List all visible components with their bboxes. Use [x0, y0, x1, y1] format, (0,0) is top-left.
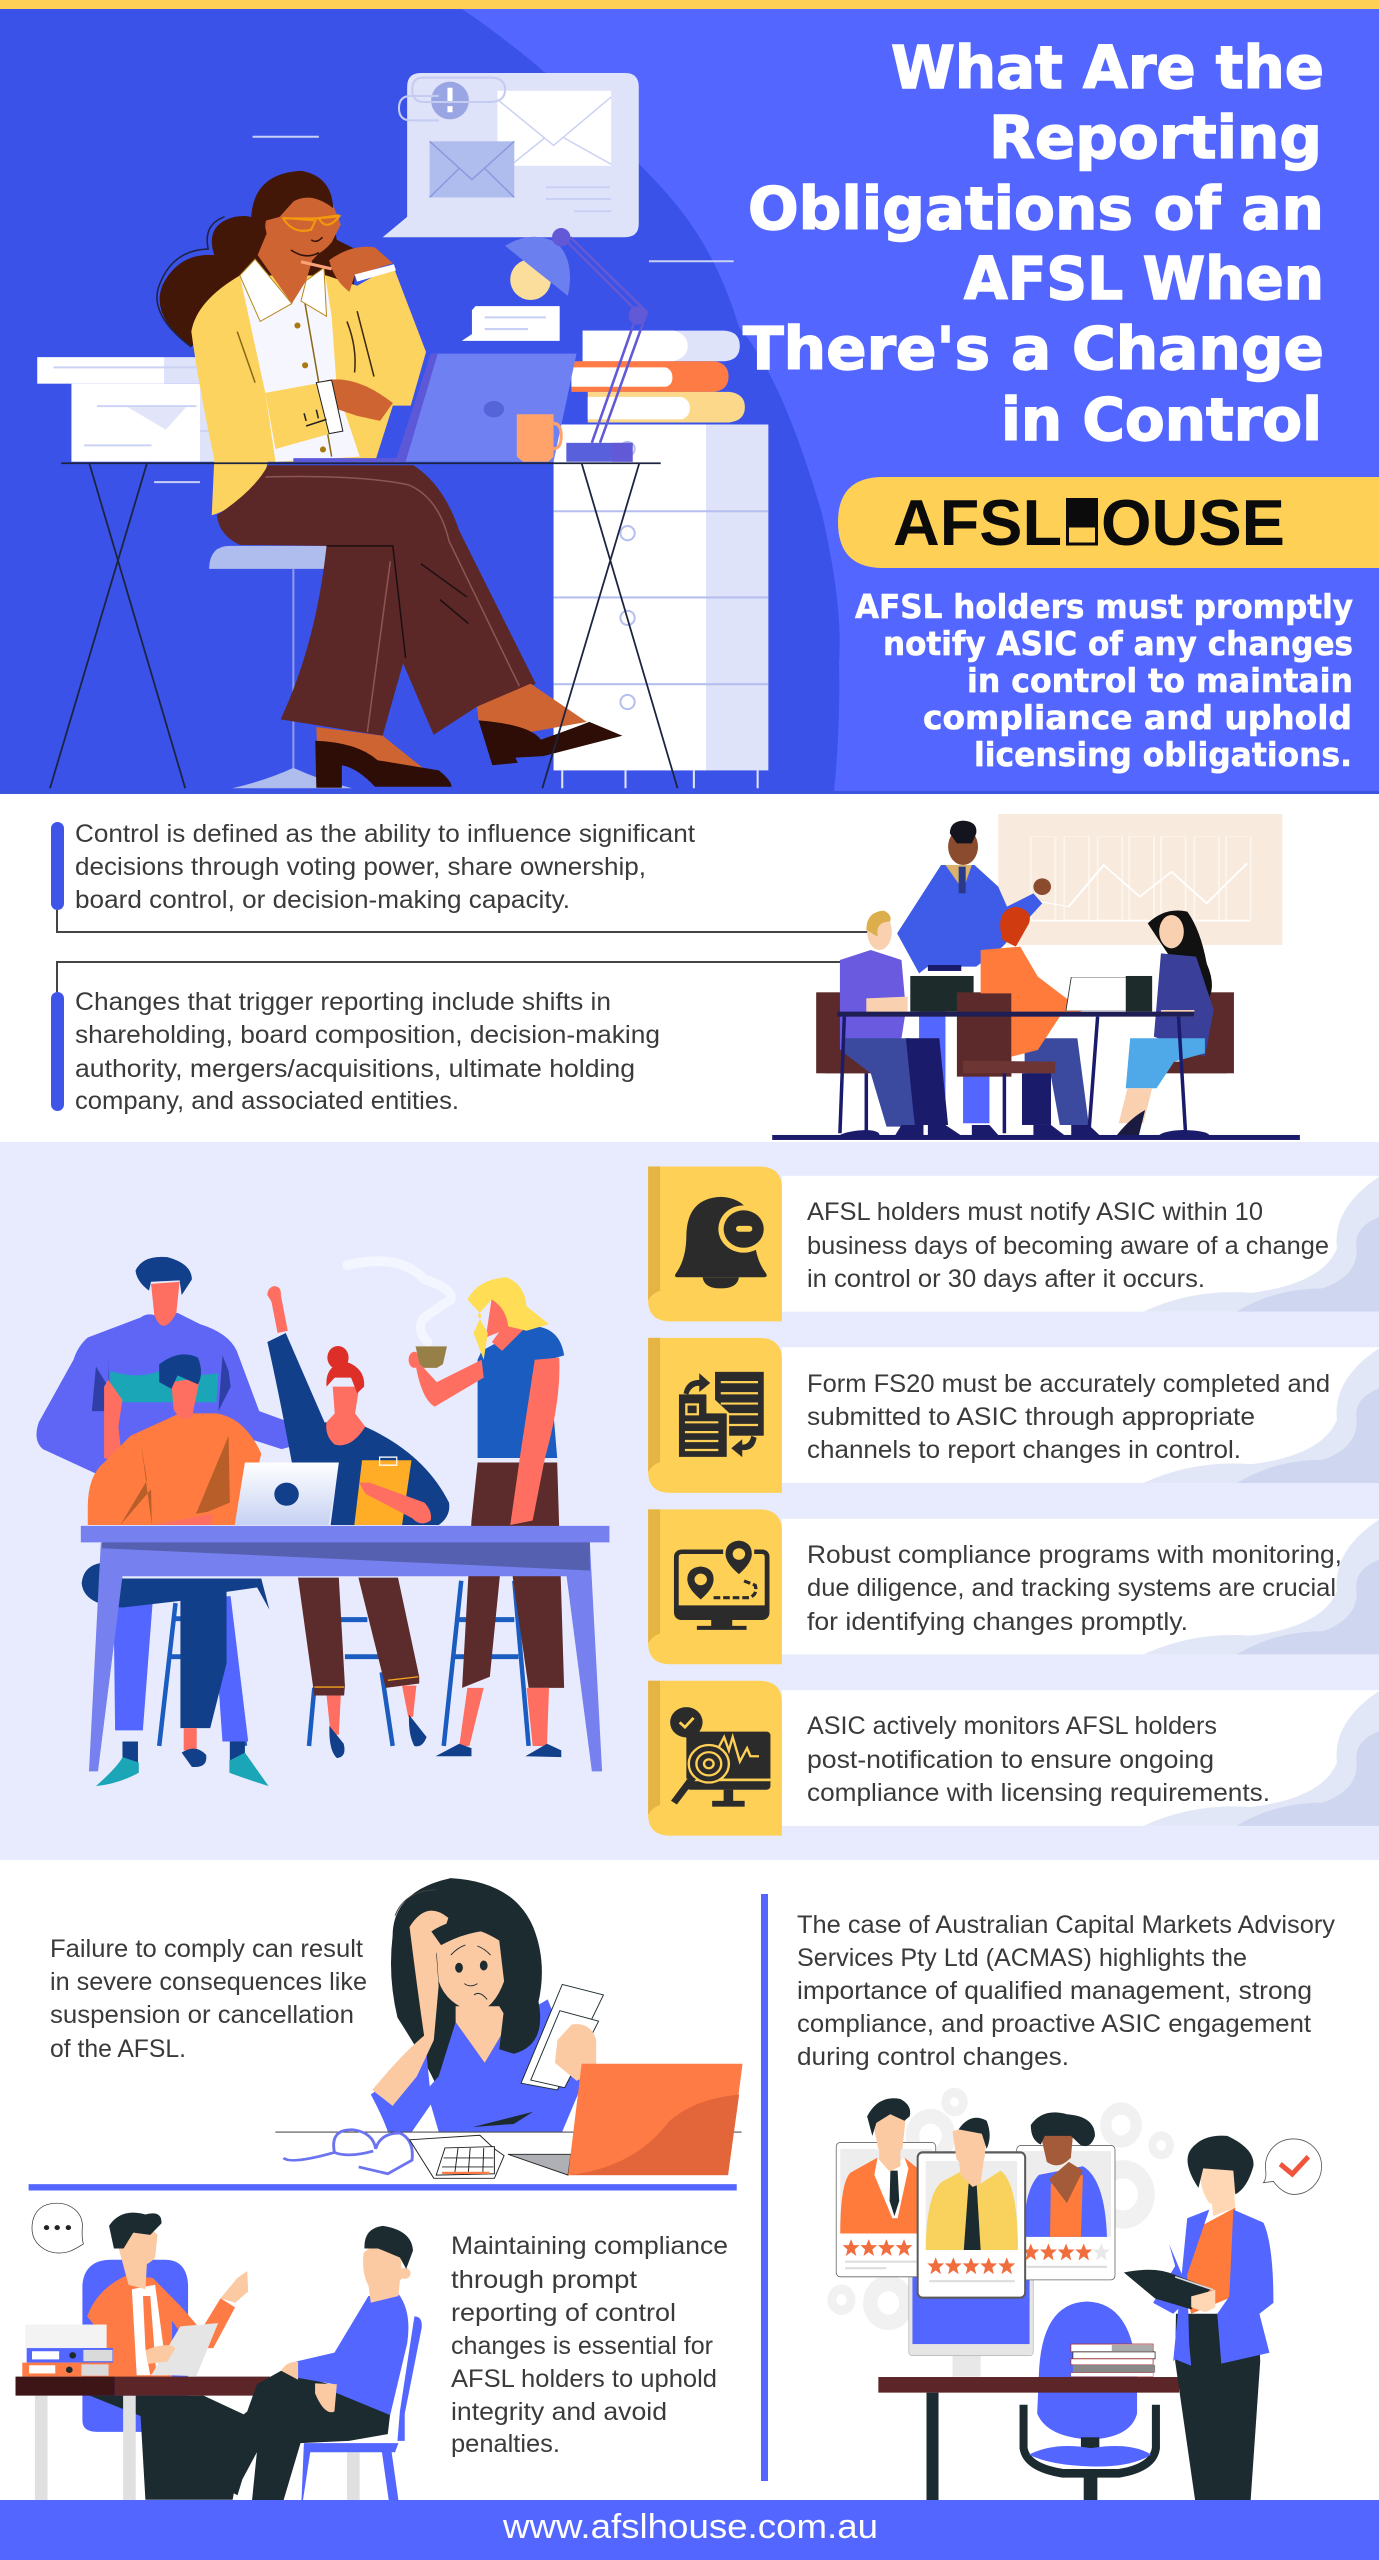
woman with coffee [409, 1277, 564, 1757]
text: failure consequences: in severe consequences like [50, 1968, 367, 1996]
text: card 3: for identifying changes promptly. [807, 1608, 1188, 1636]
check bubble [1263, 2139, 1322, 2194]
text: maintaining compliance: penalties. [451, 2430, 560, 2458]
text: control definition: decisions through voting power, share ownership, [75, 853, 646, 881]
text: card 3: Robust compliance programs with monitoring, [807, 1541, 1342, 1569]
text: control definition: Control is defined as the ability to influence significant [75, 820, 695, 848]
table [16, 2377, 270, 2500]
stressed woman [371, 1878, 603, 2132]
desktop monitor [909, 2270, 1033, 2377]
sleeve and hands [265, 247, 396, 449]
text: maintaining compliance: integrity and avoid [451, 2398, 667, 2426]
text: card 1: business days of becoming aware of a change [807, 1232, 1329, 1260]
trousers [217, 465, 536, 736]
title: What Are the [891, 33, 1324, 102]
text: maintaining compliance: Maintaining compliance [451, 2232, 728, 2260]
text: card 3 [807, 1541, 1342, 1636]
text: card 4: ASIC actively monitors AFSL holders [807, 1712, 1217, 1740]
illustration: candidate review [832, 2093, 1322, 2501]
text: card 2: channels to report changes in control. [807, 1436, 1241, 1464]
text: reporting triggers: Changes that trigger reporting include shifts in [75, 988, 611, 1016]
man in orange jacket [82, 2213, 248, 2500]
title: Obligations of an [748, 174, 1324, 243]
profile card right [1017, 2112, 1115, 2280]
text: card 2 [807, 1370, 1330, 1464]
feet and heels [315, 684, 622, 788]
table [81, 1526, 609, 1771]
vertical divider [761, 1894, 768, 2481]
text: reporting triggers [75, 988, 660, 1115]
illustration: colleagues at table [36, 1257, 609, 1786]
illustration: stressed woman and conversation [16, 1878, 743, 2500]
subtitle: in control to maintain [967, 661, 1353, 700]
title: Reporting [989, 103, 1322, 172]
book stack [1071, 2344, 1155, 2377]
yellow jacket and shirt [191, 259, 426, 515]
text: failure consequences: suspension or cancellation [50, 2001, 354, 2029]
title: AFSL When [964, 244, 1324, 313]
text: card 1: in control or 30 days after it occurs. [807, 1265, 1205, 1293]
subtitle: notify ASIC of any changes [883, 624, 1353, 663]
speech bubble [32, 2203, 83, 2253]
text: ACMAS case [797, 1911, 1335, 2071]
steam [347, 1261, 451, 1342]
text: card 1: AFSL holders must notify ASIC within 10 [807, 1198, 1263, 1226]
desk lamp [505, 228, 647, 462]
text: maintaining compliance [451, 2232, 728, 2458]
woman [1117, 911, 1214, 1135]
orange man [957, 907, 1117, 1125]
text: ACMAS case: importance of qualified management, strong [797, 1977, 1312, 2005]
card 4 background [648, 1681, 1379, 1836]
text: ACMAS case: Services Pty Ltd (ACMAS) highlights the [797, 1944, 1247, 1972]
tall man in blue [36, 1257, 290, 1521]
glasses and papers [284, 2130, 504, 2178]
panel: hero background [0, 0, 1379, 794]
stool [209, 546, 352, 788]
divider [29, 2184, 737, 2191]
subtitle [855, 587, 1353, 774]
text: maintaining compliance: changes is essential for [451, 2332, 713, 2360]
text: failure consequences: of the AFSL. [50, 2035, 186, 2063]
text: ACMAS case: The case of Australian Capital Markets Advisory [797, 1911, 1335, 1939]
logo pill: OUSE [1101, 486, 1285, 559]
text: reporting triggers: shareholding, board composition, decision-making [75, 1021, 660, 1049]
text: card 1 [807, 1198, 1329, 1293]
small chat bubble [462, 306, 560, 341]
card 3 background [648, 1509, 1379, 1664]
card 2 background [648, 1338, 1379, 1493]
text: card 4: compliance with licensing requirements. [807, 1779, 1270, 1807]
desk [878, 2377, 1179, 2501]
hair behind [157, 171, 357, 347]
subtitle: compliance and uphold [923, 698, 1352, 737]
man in blue shirt [194, 2226, 422, 2500]
collar [240, 259, 327, 321]
subtitle: AFSL holders must promptly [855, 587, 1353, 626]
panel: obligations cards [648, 1167, 1379, 1836]
laptop [293, 354, 577, 462]
text: control definition: board control, or decision-making capacity. [75, 886, 570, 914]
office chair [1024, 2302, 1156, 2501]
title [743, 33, 1324, 454]
face and neck [251, 171, 341, 304]
presentation board [998, 814, 1282, 945]
orange laptop [275, 2064, 743, 2175]
logo pill: AFSL [893, 486, 1062, 559]
speech bubble with envelopes [383, 73, 639, 237]
stools [159, 1581, 529, 1746]
background gears [832, 2093, 1170, 2322]
icon: documents [678, 1372, 764, 1458]
man in blue trousers [82, 1563, 269, 1786]
woman with clipboard [1124, 2136, 1273, 2501]
text: card 2: submitted to ASIC through appropriate [807, 1403, 1255, 1431]
woman with raised arm [267, 1286, 449, 1758]
icon: bell [675, 1197, 769, 1288]
icon: monitor with map pins [676, 1541, 767, 1630]
icon: monitor with magnifier [670, 1707, 770, 1807]
foot in front [182, 1728, 206, 1767]
laptop [235, 1462, 339, 1525]
laptop dark [910, 976, 974, 1012]
title: in Control [1001, 385, 1322, 454]
mug [517, 414, 561, 462]
text: failure consequences: Failure to comply can result [50, 1935, 363, 1963]
filing cabinet [554, 424, 768, 788]
card 1 background [648, 1167, 1379, 1321]
text: reporting triggers: authority, mergers/acquisitions, ultimate holding [75, 1055, 635, 1083]
text: maintaining compliance: through prompt [451, 2266, 637, 2294]
text: reporting triggers: company, and associated entities. [75, 1087, 459, 1115]
profile card centre [918, 2118, 1025, 2298]
text: failure consequences [50, 1935, 367, 2063]
text: card 3: due diligence, and tracking systems are crucial [807, 1574, 1336, 1602]
stack of books [571, 331, 745, 422]
text: maintaining compliance: AFSL holders to uphold [451, 2365, 717, 2393]
text: card 2: Form FS20 must be accurately completed and [807, 1370, 1330, 1398]
footer [0, 2500, 1379, 2560]
man in orange shirt [88, 1354, 261, 1525]
text: control definition [75, 820, 695, 914]
table [772, 1012, 1300, 1140]
logo pill [838, 477, 1379, 568]
profile card left [836, 2098, 936, 2277]
standing man [897, 821, 1051, 1123]
text: card 4: post-notification to ensure ongoing [807, 1746, 1214, 1774]
text: ACMAS case: compliance, and proactive ASIC engagement [797, 2010, 1311, 2038]
illustration: woman working at desk [37, 73, 768, 788]
subtitle: licensing obligations. [974, 735, 1352, 774]
boxes on desk [37, 357, 265, 462]
text: ACMAS case: during control changes. [797, 2043, 1069, 2071]
laptop open [1066, 976, 1152, 1012]
title: There's a Change [743, 314, 1324, 383]
panel: lavender section background [0, 1142, 1379, 1860]
text: maintaining compliance: reporting of control [451, 2299, 676, 2327]
text: card 4 [807, 1712, 1270, 1807]
footer: www.afslhouse.com.au [502, 2508, 878, 2546]
folders [22, 2325, 113, 2377]
illustration: team meeting [772, 814, 1300, 1140]
seated man [840, 911, 948, 1127]
chairs [816, 992, 1234, 1073]
desk [50, 463, 678, 788]
panel: definition of control [51, 820, 888, 1115]
